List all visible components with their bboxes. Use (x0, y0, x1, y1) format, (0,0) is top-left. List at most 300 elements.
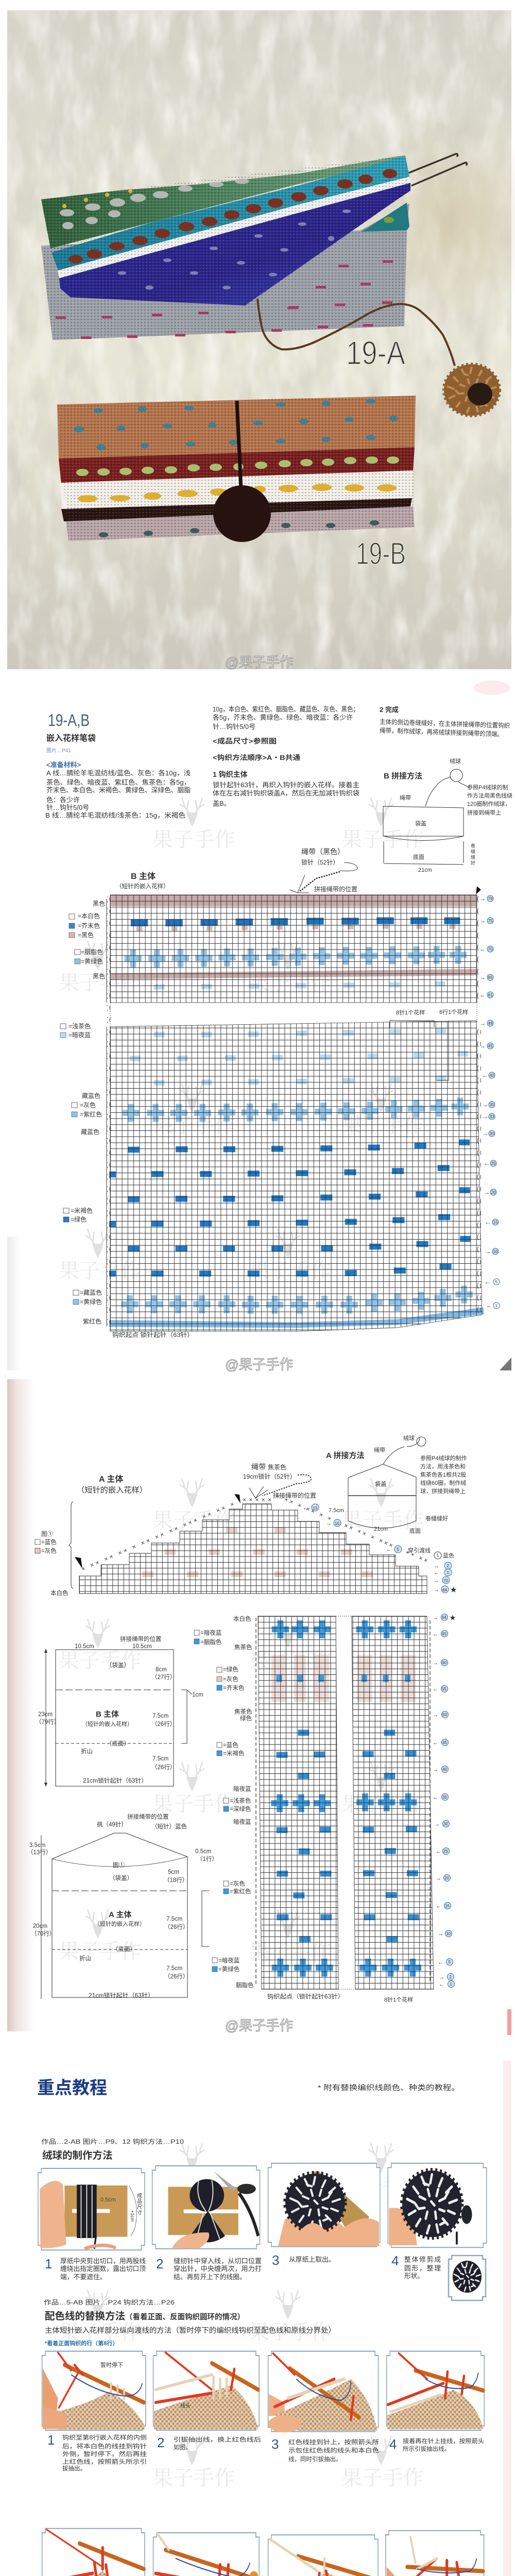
schematic: B body: 8cm (156, 1667, 167, 1673)
tutorial photos: steps 1-8 (42, 2351, 484, 2576)
row numbers right: → (484, 1189, 490, 1196)
diagram: B joining method: 袋盖 (415, 820, 426, 827)
colour legend left: =藏蓝色 (80, 1289, 102, 1296)
row numbers A right: 15 (445, 1904, 450, 1908)
row numbers right: 61 (488, 993, 493, 997)
note: * 附有替换编织线颜色、种类的教程。 (318, 2083, 460, 2092)
legend A: 图① (41, 1531, 53, 1537)
rope (258, 299, 455, 366)
row numbers A right: 50 (442, 1713, 447, 1717)
materials continued (213, 705, 359, 731)
cord annotation A: 19cm锁针（52针） (243, 1472, 296, 1480)
legend body A: 焦茶色 (234, 1708, 252, 1715)
photo 4: trimming (388, 2163, 487, 2247)
photo labels: 0.5cm (100, 2197, 116, 2203)
row numbers A right: ← (433, 1794, 438, 1801)
title: 嵌入花样笔袋 (46, 733, 96, 743)
legend body A: =绿色 (223, 1666, 238, 1673)
row numbers right: → (482, 1101, 488, 1108)
watermarks: 果子手作 (152, 823, 235, 853)
chart title A: A 主体 (99, 1474, 123, 1484)
cord annotation: 绳带（黑色） (301, 848, 345, 856)
legend body A: 暗夜蓝 (233, 1785, 251, 1792)
diagram: B joining method: 绳带 (400, 794, 411, 801)
watermark on photo: @果子手作 (225, 655, 293, 670)
repeat note A: 8针1个花样 (384, 1996, 413, 2003)
diagram: B joining method (383, 757, 512, 873)
step captions: pompom: 端，不要遮住。 (60, 2273, 107, 2281)
row numbers right: 10 (493, 1249, 498, 1254)
row numbers A upper: 穿引渡线 (408, 1547, 431, 1554)
legend A (35, 1531, 68, 1597)
mustard centres (277, 1675, 410, 1682)
materials list: 色：各少许 (46, 796, 80, 804)
decorative page-edge tints (7, 681, 511, 2576)
diagram: A joining method: 7.5cm (329, 1507, 344, 1514)
step captions: pompom: 整体修剪成 (404, 2256, 441, 2263)
row numbers A right: 10 (446, 1931, 451, 1936)
panel: product photo (7, 10, 515, 670)
schematic: A body: 挑（49针） (97, 1821, 127, 1828)
green motifs on red band (76, 456, 399, 476)
chart: body B colour blocks (109, 895, 484, 1328)
row numbers right: → (479, 1020, 486, 1027)
diagram: A joining method: 球，拼接到绳带上 (420, 1487, 466, 1495)
photo labels: +1cm (130, 2210, 135, 2222)
diagram: A joining method: 底面 (409, 1527, 421, 1534)
row numbers A upper: 1 (447, 1570, 449, 1575)
schematic: B body: 23cm (38, 1711, 53, 1718)
legend body A: =紫红色 (230, 1888, 251, 1895)
row numbers A right: 40 (442, 1767, 447, 1772)
finished size: <成品尺寸>参照图 (213, 737, 277, 745)
watermarks: 果子手作 (152, 1788, 235, 1817)
row numbers A upper: 蓝色 (443, 1552, 454, 1559)
materials list: B 线…腈纶羊毛混纺线/浅茶色：15g，米褐色 (45, 811, 185, 819)
step 6 photo (153, 2533, 259, 2576)
photo labels: 品 (137, 2198, 142, 2205)
step 1 text: 盖B。 (213, 800, 231, 807)
row numbers right: 30 (489, 1131, 494, 1136)
schematic: A body: （70行） (31, 1930, 55, 1937)
colour legend left: 黑色 (93, 900, 105, 907)
schematic: A body: A 主体 (109, 1910, 131, 1919)
crosses top (272, 1620, 417, 1638)
schematic: B body: 拼接绳带的位置 (120, 1635, 162, 1642)
schematic: B body: 10.5cm (75, 1643, 94, 1650)
step 2 text (380, 718, 510, 738)
cord annotation A: 绳带 焦茶色 (251, 1463, 286, 1471)
pale dots on blue flap (118, 209, 351, 290)
materials list: 茶色、绿色、暗夜蓝、紫红色、焦茶色：各5g， (46, 778, 191, 786)
legend A: 本白色 (50, 1589, 68, 1597)
step captions 1-4: 如图。 (174, 2444, 192, 2451)
light crosses row (125, 946, 467, 968)
schematic: B body: （袋盖） (106, 1662, 130, 1669)
row numbers A upper: → (326, 1520, 332, 1527)
diagram: B joining method: 120圈制作绒球， (467, 800, 510, 807)
legend body A: 暗夜蓝 (233, 1818, 251, 1825)
diagram: A joining method (326, 1434, 467, 1534)
photo labels: 成 (137, 2193, 142, 2199)
legend body A: 绿色 (240, 1715, 252, 1722)
schematic: B body: 10.5cm (132, 1643, 152, 1650)
legend body A: =灰色 (223, 1675, 238, 1683)
schematic: A body (27, 1813, 218, 1999)
materials list: A 线…腈纶羊毛混纺线/蓝色、灰色：各10g，浅 (46, 769, 191, 777)
row numbers right: ← (485, 1218, 491, 1226)
button (213, 485, 271, 542)
diagram: B joining method: 好 (471, 860, 475, 866)
row numbers A right: 65 (442, 1632, 447, 1636)
yellow motifs on white band (78, 484, 397, 502)
colour legend left: =灰色 (80, 1101, 96, 1109)
row numbers A right: ← (433, 1686, 438, 1692)
row numbers A right: → (433, 1615, 438, 1621)
diagram: A joining method: 绳带 (374, 1446, 385, 1453)
diagram: A joining method: 21cm (374, 1526, 388, 1532)
colour legend left: 紫红色 (83, 1317, 101, 1325)
materials continued: 针…钩针5/0号 (213, 723, 255, 731)
legend body A: =灰色 (230, 1880, 245, 1887)
step captions 1-4: 钩织至第8行嵌入花样的内侧 (62, 2434, 147, 2441)
step 3 photo (268, 2351, 379, 2432)
watermarks: 果子手作 (249, 967, 331, 996)
pompom (444, 364, 500, 416)
watermarks: 果子手作 (341, 1788, 424, 1817)
row numbers A right (433, 1614, 456, 1988)
legend body A: 焦茶色 (234, 1643, 252, 1651)
diagram: B joining method: B 拼接方法 (384, 771, 422, 781)
colour legend left: =胭脂色 (81, 948, 103, 956)
diagram: B joining method: 缝 (471, 849, 475, 854)
edging crosses: × ×× × ×× × × × ×× ×× × ××× × ×× ×× (275, 1492, 429, 1564)
description: 主体短针嵌入花样部分纵向渡线的方法（暂时停下的编织线钩织至配色线和原线分界处） (45, 2326, 336, 2334)
repeat annotation (390, 1008, 468, 1080)
step captions: pompom: 1 (45, 2256, 52, 2272)
row numbers A right: 25 (443, 1849, 448, 1854)
row numbers A right: ← (436, 1903, 441, 1909)
start note: 钩织起点 锁针起针（63针） (112, 1331, 194, 1338)
yellow dots (62, 189, 132, 208)
schematic: A body: 7.5cm (166, 1916, 182, 1922)
row numbers A right: ← (439, 1981, 444, 1988)
schematic: A body: 折山 (79, 1955, 91, 1962)
legend body A: =深绿色 (230, 1805, 251, 1812)
colour legend left: =绿色 (71, 1215, 87, 1223)
schematic: A body: （26行） (164, 1973, 188, 1980)
row numbers A right: → (439, 1974, 444, 1980)
pink motifs on grey body (56, 260, 393, 339)
step 1 text: 锁针起针63针，再织入钩针的嵌入花样。接着主 (213, 781, 359, 789)
step captions: pompom: 3 (272, 2252, 279, 2268)
panel: pattern text page (45, 705, 512, 1372)
step captions 1-4: 接着再在针上挂线，按照箭头 (403, 2437, 484, 2445)
row numbers A right: ★ (450, 1614, 456, 1621)
step captions 1-4: 3 (271, 2436, 279, 2452)
panel: body A pattern page (27, 1434, 467, 2033)
step captions 1-4: 所示引拔抽出线。 (403, 2445, 450, 2452)
chart: flap A stair grid (79, 1504, 427, 1594)
colour legend left (60, 900, 105, 1325)
heading: 重点教程 (37, 2078, 107, 2098)
cord annotation A (243, 1463, 316, 1499)
cord annotation A: 拼接绳带的位置 (273, 1492, 316, 1499)
materials continued: 10g，本白色、紫红色、胭脂色、藏蓝色、灰色、黑色； (213, 705, 359, 714)
watermarks: 果子手作 (341, 2462, 424, 2491)
row numbers right: ← (479, 945, 486, 953)
watermarks: 果子手作 (249, 1255, 331, 1284)
watermarks: 果子手作 (152, 1109, 235, 1139)
start note A: 钩织起点（锁针起针63针） (267, 1993, 344, 2000)
watermarks: 果子手作 (152, 2169, 235, 2198)
materials list: 芥末色、本白色、米褐色、黄绿色、深绿色、胭脂 (46, 786, 191, 794)
row-end loops (107, 895, 481, 1331)
row numbers A right: 20 (444, 1876, 449, 1880)
schematic: A body: 20cm (33, 1923, 47, 1929)
green band motifs (60, 179, 249, 229)
bottom band (109, 1307, 484, 1328)
repeat annotation: 8针1个花样 (396, 1009, 425, 1016)
row numbers A right: 55 (442, 1687, 447, 1691)
diagram: A joining method: A 拼接方法 (326, 1451, 364, 1460)
row numbers right: 40 (489, 1073, 494, 1078)
row numbers A right: → (433, 1660, 438, 1666)
schematic: A body: （1行） (197, 1856, 218, 1862)
step 7 photo (268, 2535, 378, 2576)
order heading: <钩织方法顺序>A・B共通 (213, 754, 300, 761)
step captions: pompom: 穿出针，中央缠两次，用力打 (174, 2265, 262, 2273)
row numbers right: → (479, 917, 486, 924)
colour legend left: =黄绿色 (81, 957, 103, 965)
row numbers A right: 5 (448, 1960, 451, 1964)
watermarks: 果子手作 (341, 2169, 424, 2198)
watermarks: 果子手作 (249, 1645, 331, 1674)
step 2 photo (153, 2351, 259, 2430)
step 8 photo (386, 2531, 484, 2576)
diagram: A joining method: 绒球 (403, 1434, 415, 1442)
watermarks: 果子手作 (341, 1109, 424, 1139)
schematic: B body: （26行） (151, 1721, 176, 1727)
step 1 heading: 1 钩织主体 (213, 770, 248, 778)
chart title: B 主体 (131, 871, 156, 881)
schematic: B body: （79行） (36, 1719, 60, 1725)
photo annotation: yarn tail: 线头 (180, 2402, 191, 2409)
row numbers A right: 2 (449, 1975, 452, 1979)
repeat annotation: 8行1个花样 (439, 1008, 468, 1015)
heading: 19-A,B: 19-A,B (48, 711, 90, 730)
schematic: A body: 拼接绳带的位置 (127, 1813, 169, 1820)
row numbers A upper: ← (303, 1505, 308, 1511)
row numbers right: ← (485, 1278, 491, 1285)
flap: teal band (52, 156, 409, 270)
photo background: textured paper (7, 10, 515, 669)
step captions 1-4: 上红色线，按照箭头所示引 (62, 2458, 147, 2465)
photo labels (100, 2193, 142, 2222)
legend body A: =暗夜蓝 (200, 1629, 221, 1636)
edging crosses (80, 1492, 429, 1573)
chart grid: upper section (110, 895, 477, 1003)
legend A: =蓝色 (41, 1538, 57, 1546)
schematic: A body: （短针的嵌入花样） (94, 1920, 145, 1927)
row numbers A right: ← (433, 1631, 438, 1637)
step captions 1-4: 线，同时引拔抽出。 (288, 2455, 342, 2463)
step 1 text (213, 781, 359, 807)
subheading: pompom: 绒球的制作方法 (42, 2149, 113, 2161)
row numbers right: 79 (488, 896, 493, 901)
pompom step photos (38, 2163, 487, 2250)
pencil case 19-B (57, 396, 416, 542)
row numbers A upper: ← (386, 1547, 391, 1553)
watermarks: 果子手作 (152, 2462, 235, 2491)
label 19-B: 19-B (356, 536, 406, 571)
colour legend left: =暗夜蓝 (68, 1031, 91, 1039)
schematic: A body: （短针）蓝色 (151, 1823, 187, 1830)
colour legend left: =米褐色 (71, 1207, 93, 1214)
step captions: pompom: 缠绕出指定圈数，露出切口顶 (60, 2265, 146, 2273)
diagram: A joining method: 卷缝缝好 (425, 1515, 448, 1522)
step captions: pompom: 厚纸中央剪出切口，用两股线 (60, 2257, 146, 2265)
step captions: pompom: 4 (391, 2253, 399, 2268)
bracket (106, 899, 107, 1327)
photo labels: 寸 (137, 2209, 142, 2216)
watermarks: 果子手作 (59, 2316, 141, 2345)
row numbers A upper: → (434, 1587, 439, 1593)
colour legend left: =芥末色 (78, 922, 100, 929)
row numbers right: ← (479, 991, 486, 998)
diagram: A joining method: 参照P4绒球的制作 (420, 1454, 467, 1462)
legend body A: 本白色 (233, 1615, 251, 1622)
watermarks: 果子手作 (59, 1645, 141, 1674)
row numbers right: → (479, 895, 486, 902)
colour legend left: 藏蓝色 (82, 1092, 100, 1099)
legend body A: =黄绿色 (218, 1965, 240, 1973)
step captions 1-4: 拔抽出。 (62, 2465, 86, 2472)
watermarks: 果子手作 (341, 1504, 424, 1533)
row numbers A right: → (436, 1875, 441, 1882)
green dashes (109, 1140, 471, 1277)
diagram: B joining method: 绒球 (450, 757, 461, 765)
schematic: B body: 7.5cm (152, 1713, 168, 1719)
row numbers right: 45 (488, 1044, 493, 1048)
schematic: A body: 3.5cm (29, 1842, 45, 1849)
small finished pompom photo (449, 2256, 486, 2300)
schematic: B body: 折山 (81, 1748, 93, 1755)
row numbers A upper: 5 (397, 1547, 400, 1552)
row numbers A upper: → (434, 1563, 439, 1569)
row numbers A right: → (438, 1931, 443, 1937)
schematic: A body: （底面） (112, 1945, 136, 1953)
row numbers A right: → (433, 1767, 438, 1773)
schematic: A body: 7.5cm (166, 1965, 182, 1972)
step captions 1-4: 1 (47, 2432, 55, 2448)
schematic: B body: 7.5cm (152, 1756, 168, 1762)
bracket A (69, 1502, 73, 1588)
legend body A (194, 1615, 254, 1989)
row numbers A upper: 10 (335, 1521, 339, 1526)
photo annotation: pause: 暂时停下 (100, 2361, 123, 2368)
diagram: B joining method: 作方法用黑色线绕 (467, 792, 512, 799)
watermarks: 果子手作 (59, 1255, 141, 1284)
row numbers A right: 60 (442, 1660, 447, 1665)
legend A: =灰色 (41, 1547, 57, 1554)
schematic: A body: （18行） (164, 1877, 188, 1884)
step captions: pompom: 结。再剪开上下的线圈。 (174, 2273, 246, 2281)
step captions 1-4: 4 (389, 2436, 397, 2452)
legend body A: =蓝色 (223, 1741, 238, 1749)
schematic: B body: B 主体 (96, 1709, 119, 1719)
cord annotation: 拼接绳带的位置 (314, 885, 357, 893)
row numbers right: 20 (491, 1190, 496, 1195)
step captions: pompom (45, 2252, 441, 2281)
step captions 1-4: 2 (157, 2435, 164, 2450)
crosses row 2 (123, 1097, 469, 1122)
photo labels: 尺 (137, 2204, 142, 2210)
row numbers A upper (303, 1504, 457, 1594)
row numbers A right: 1 (450, 1982, 452, 1987)
diagram: A joining method: 焦茶色各1根共2股 (420, 1471, 466, 1478)
step 2 heading: 2 完成 (380, 706, 399, 714)
legend body A: =米褐色 (223, 1750, 245, 1757)
diagram: A joining method: 方法，用浅茶色和 (420, 1463, 466, 1470)
motifs on lilac band (99, 520, 379, 537)
row numbers A right: 35 (442, 1795, 447, 1800)
watermarks: 果子手作 (152, 1504, 235, 1533)
watermark handle: @果子手作 (225, 1357, 293, 1372)
crosses mid and bottom (271, 1793, 421, 1977)
flap: blue panel (59, 183, 410, 306)
schematic: B body: 21cm锁针起针（63针） (83, 1777, 147, 1784)
work reference: colour change: 作品…5-AB 图片…P24 钩织方法…P26 (44, 2298, 175, 2306)
row numbers A right: 30 (443, 1822, 448, 1826)
pencil case 19-A (41, 154, 500, 416)
row numbers right: ← (482, 1072, 488, 1079)
flap: green band (41, 156, 405, 248)
row numbers A upper: 1 (437, 1553, 439, 1558)
colour legend left: =本白色 (78, 912, 100, 920)
row note: *看着正面钩织的行（第8行） (45, 2340, 118, 2347)
chart subtitle: （短针的嵌入花样） (116, 883, 169, 890)
diagram: A joining method: 袋盖 (375, 1480, 386, 1487)
dashes (277, 1730, 419, 1942)
row numbers right: 33 (489, 1114, 494, 1119)
schematic: B body: （26行） (151, 1764, 176, 1771)
watermarks: 果子手作 (59, 967, 141, 996)
row numbers right: 35 (489, 1103, 494, 1107)
watermarks: 果子手作 (341, 823, 424, 853)
watermark handle: @果子手作 (225, 2018, 293, 2033)
work reference: pompom: 作品…2-AB 图片…P9、12 钩织方法…P10 (41, 2138, 184, 2145)
row numbers right: 75 (488, 919, 493, 923)
lower section dashes (130, 1028, 468, 1086)
schematic: A body: （26行） (164, 1924, 188, 1930)
diagram: B joining method: 缝 (471, 854, 475, 860)
chart: flap A colour blocks (142, 1527, 373, 1577)
colour legend left: =黑色 (78, 931, 94, 939)
step captions: pompom: 2 (156, 2256, 163, 2272)
red motifs on teal band (68, 169, 397, 263)
row numbers right: 25 (491, 1161, 496, 1166)
watermarks: 果子手作 (249, 1935, 331, 1964)
row numbers right: 15 (493, 1220, 498, 1225)
schematic: A body: （袋盖） (109, 1874, 133, 1882)
step captions 1-4 (47, 2432, 484, 2472)
step captions 1-4: 外侧，暂时停下。然后再挂 (62, 2450, 147, 2458)
grey pattern blocks (271, 1655, 416, 1702)
label 19-A: 19-A (346, 334, 405, 371)
schematic: A body: 图① (113, 1862, 125, 1869)
step captions 1-4: 示包住红色线的线头和本白色 (288, 2447, 380, 2454)
